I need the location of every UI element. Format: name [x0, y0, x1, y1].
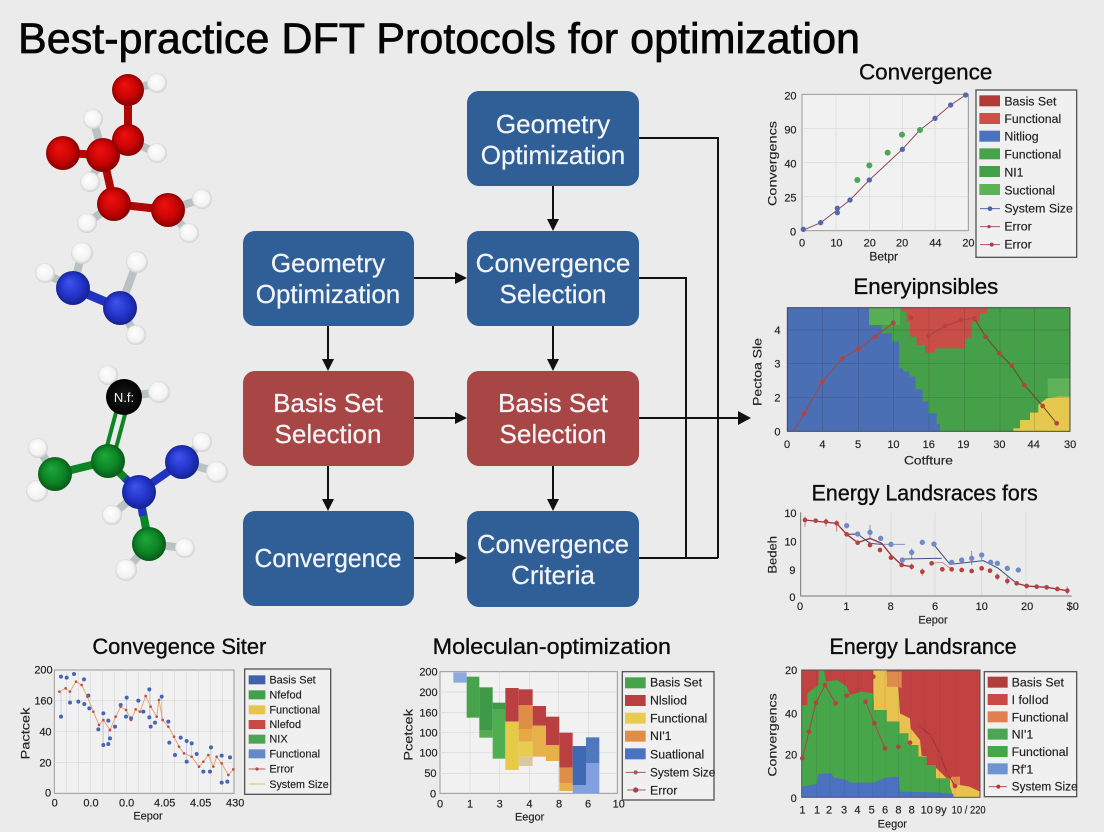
scatter line chart: 200: [34, 664, 53, 676]
scatter line chart: 160: [34, 695, 53, 707]
heatmap: Cotfture: [904, 454, 953, 468]
molecule: red oxygen chain: [46, 73, 212, 243]
stacked area chart: [766, 665, 986, 830]
heatmap: 30: [1064, 439, 1076, 451]
legend: Suatlional: [650, 747, 704, 761]
stacked area chart: 3: [841, 804, 847, 816]
flow box: convergence selection: [467, 231, 639, 326]
line chart with error bars: 0: [789, 592, 795, 604]
flowchart connectors and arrows: [322, 138, 751, 564]
molecule: green, blue and black atoms: [26, 365, 228, 581]
stepped bar chart: 8: [556, 799, 562, 811]
heatmap: 2: [774, 393, 780, 405]
line chart with error bars: 6: [932, 601, 938, 613]
heatmap: 10: [887, 439, 900, 451]
chart title: Convegence Siter: [92, 634, 267, 659]
flow box: basis set selection right: Selection: [500, 419, 606, 449]
stepped bar chart: 3: [497, 799, 503, 811]
flow box: basis set selection left: Selection: [275, 419, 381, 449]
stepped bar chart: 1: [467, 799, 473, 811]
flow box: convergence: Convergence: [254, 543, 402, 573]
flow box: geometry optimization top: [467, 91, 639, 186]
line chart with error bars: $0: [1067, 601, 1079, 613]
legend: NIX: [269, 734, 288, 746]
stacked area chart: 10 / 220: [952, 804, 986, 816]
chart title: Convergence: [859, 59, 992, 84]
line chart with error bars: 8: [888, 601, 894, 613]
stepped bar chart: [402, 667, 625, 824]
stepped bar chart: 100: [419, 748, 438, 760]
stacked area chart: 20: [785, 665, 797, 677]
chart panel: convergence series: [18, 634, 331, 822]
heatmap: 5: [855, 439, 861, 451]
line chart with error bars: 20: [1021, 601, 1033, 613]
chart panel: energy landscapes: [766, 480, 1079, 627]
stacked area chart: 0: [791, 793, 797, 805]
chart title: Energy Landsraces fors: [812, 480, 1038, 505]
chart panel: energy map: [750, 274, 1076, 468]
stepped bar chart: 0: [430, 789, 436, 801]
chart title: Energy Landsrance: [829, 634, 1017, 659]
legend: Error: [1004, 238, 1032, 252]
legend: NI1: [1004, 165, 1024, 179]
legend: Functional: [650, 711, 707, 725]
flow box: convergence selection: Selection: [500, 279, 606, 309]
flow box: basis set selection right: [467, 371, 639, 466]
line chart: 0: [799, 238, 805, 250]
stacked area chart: 20: [785, 750, 797, 762]
stacked area chart: 8: [909, 804, 915, 816]
stacked area chart: 2: [826, 804, 832, 816]
heatmap: 30: [993, 439, 1006, 451]
stepped bar chart: 10: [613, 799, 625, 811]
stepped bar chart: 200: [419, 667, 438, 679]
flow box: basis set selection right: Basis Set: [498, 388, 609, 418]
scatter line chart: 0.0: [83, 798, 99, 810]
scatter line chart: 4.05: [154, 798, 175, 810]
line chart: 25: [784, 192, 797, 204]
legend: Functional: [1012, 745, 1068, 759]
line chart: 20: [784, 90, 797, 102]
line chart with error bars: 10: [784, 537, 797, 549]
flow box: geometry optimization top: Geometry: [496, 109, 610, 139]
legend: Functional: [1004, 112, 1061, 126]
heatmap: 4: [819, 439, 825, 451]
stepped bar chart: 50: [424, 768, 437, 780]
scatter line chart: Eepor: [133, 810, 163, 822]
legend: System Size: [650, 766, 715, 780]
chart title: Eneryipnsibles: [853, 274, 998, 299]
legend: I folIod: [1012, 693, 1049, 707]
legend: System Size: [1012, 780, 1078, 794]
legend: Suctional: [1004, 183, 1055, 197]
stepped bar chart: 100: [419, 728, 438, 740]
flow box: convergence selection: Convergence: [476, 248, 630, 278]
line chart with error bars: 10: [784, 508, 797, 520]
line chart: [766, 90, 975, 264]
legend: [984, 672, 1078, 797]
molecule: blue nitrogen pair: [35, 242, 148, 345]
title: Best-practice DFT Protocols for optimization: [18, 15, 860, 63]
stacked area chart: 4: [854, 804, 860, 816]
stepped bar chart: 160: [419, 707, 438, 719]
scatter line chart: 0: [52, 798, 58, 810]
line chart: 90: [784, 124, 797, 136]
line chart: 10: [830, 238, 843, 250]
line chart with error bars: 9: [789, 565, 795, 577]
chart title: Moleculan-optimization: [433, 634, 671, 659]
legend: Error: [1004, 220, 1032, 234]
stacked area chart: 10: [921, 804, 933, 816]
legend: Functional: [1012, 710, 1068, 724]
line chart with error bars: [766, 508, 1079, 627]
legend: Nitliog: [1004, 130, 1039, 144]
scatter line chart: [18, 664, 244, 822]
stacked area chart: 1: [799, 804, 805, 816]
line chart: 20: [896, 238, 908, 250]
legend: Basis Set: [1004, 94, 1057, 108]
legend: Basis Set: [1012, 676, 1065, 690]
heatmap: 4: [774, 325, 780, 337]
flow box: convergence: [243, 511, 414, 606]
line chart: 40: [784, 158, 797, 170]
chart panel: energy landscape area: [766, 634, 1078, 830]
line chart with error bars: 10: [976, 601, 988, 613]
stepped bar chart: 6: [585, 799, 591, 811]
flow box: geometry optimization left: Geometry: [271, 248, 385, 278]
line chart: 20: [962, 238, 975, 250]
line chart: 0: [790, 226, 796, 238]
legend: Rf'1: [1012, 762, 1033, 776]
stepped bar chart: 200: [419, 687, 438, 699]
scatter line chart: 40: [39, 726, 52, 738]
stacked area chart: 40: [785, 708, 797, 720]
heatmap: 3: [774, 359, 780, 371]
legend: Error: [269, 764, 294, 776]
stacked area chart: 1: [814, 804, 820, 816]
flow box: basis set selection left: [243, 371, 414, 466]
stepped bar chart: Pcetcek: [402, 708, 416, 761]
flow box: convergence criteria: Convergence: [477, 529, 629, 559]
legend: NI'1: [1012, 728, 1033, 742]
flow box: geometry optimization left: [243, 231, 414, 326]
heatmap: 0: [784, 439, 790, 451]
legend: [976, 90, 1077, 257]
stacked area chart: Eegor: [878, 818, 907, 830]
scatter line chart: 20: [39, 757, 52, 769]
heatmap: [750, 308, 1076, 468]
scatter line chart: 0: [45, 788, 51, 800]
line chart with error bars: Bedeh: [766, 536, 780, 574]
line chart with error bars: 0: [797, 601, 803, 613]
stacked area chart: 9y: [935, 804, 947, 816]
legend: Nlefod: [269, 719, 301, 731]
scatter line chart: Pactcek: [18, 707, 32, 759]
stacked area chart: 5: [869, 804, 875, 816]
stacked area chart: 8: [895, 804, 901, 816]
legend: Basis Set: [650, 676, 703, 690]
stepped bar chart: 0: [437, 799, 443, 811]
legend: Functional: [269, 704, 320, 716]
line chart with error bars: 1: [843, 601, 849, 613]
stepped bar chart: Eegor: [515, 812, 545, 824]
flow box: geometry optimization left: Optimization: [256, 279, 400, 309]
flow box: convergence criteria: Criteria: [511, 560, 595, 590]
stepped bar chart: 4: [526, 799, 532, 811]
heatmap: Pectoa Sle: [750, 338, 764, 406]
legend: Error: [650, 784, 677, 798]
line chart with error bars: Eepor: [918, 615, 948, 627]
scatter line chart: 430: [226, 798, 244, 810]
chart panel: convergence: [766, 59, 1077, 264]
flow box: basis set selection left: Basis Set: [273, 388, 384, 418]
legend: Functional: [1004, 147, 1061, 161]
molecule: green, blue and black atoms: N.f:: [114, 390, 134, 405]
line chart: 20: [864, 238, 876, 250]
legend: Nlsliod: [650, 693, 687, 707]
stacked area chart: 6: [882, 804, 888, 816]
legend: Functional: [269, 749, 320, 761]
flow box: convergence criteria: [467, 511, 639, 607]
line chart: Convergencs: [766, 121, 780, 206]
line chart: 44: [929, 238, 942, 250]
legend: [622, 672, 715, 800]
legend: Nfefod: [269, 689, 302, 701]
heatmap: 44: [1028, 439, 1040, 451]
heatmap: 19: [957, 439, 970, 451]
scatter line chart: 0.0: [119, 798, 134, 810]
stacked area chart: Convergencs: [766, 693, 780, 777]
scatter line chart: 4.05: [190, 798, 211, 810]
heatmap: 16: [923, 439, 935, 451]
line chart: Betpr: [869, 250, 898, 264]
legend: System Size: [269, 779, 329, 791]
legend: System Size: [1004, 202, 1073, 216]
flow box: geometry optimization top: Optimization: [481, 140, 625, 170]
legend: Basis Set: [269, 675, 316, 687]
chart panel: molecular optimization: [402, 634, 715, 824]
heatmap: 0: [774, 427, 780, 439]
legend: [245, 669, 331, 794]
legend: NI'1: [650, 729, 672, 743]
